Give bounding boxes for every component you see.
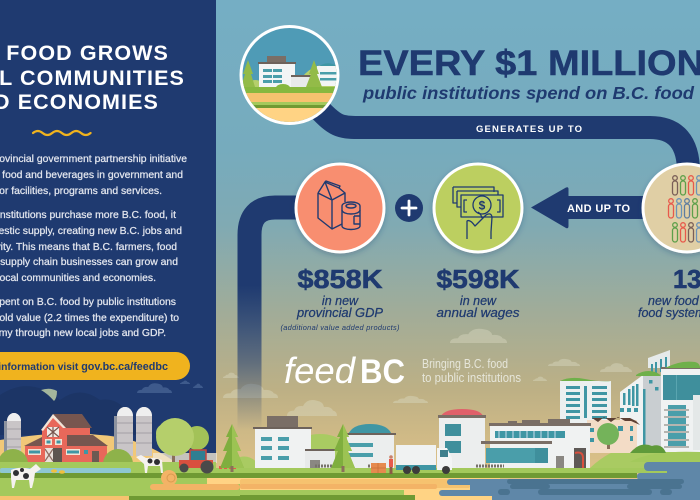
truck	[396, 445, 452, 474]
road: from GDP circle down, fading	[250, 208, 300, 430]
hay hills	[0, 433, 175, 462]
stat: GDP: (additional value added products)	[280, 323, 400, 332]
silos	[4, 407, 152, 456]
plus sign	[395, 194, 423, 222]
angled building	[620, 371, 661, 452]
hay bale	[161, 470, 177, 486]
tower block	[560, 378, 611, 425]
dome building	[344, 424, 396, 468]
stat: jobs	[638, 266, 700, 320]
pond	[0, 468, 131, 473]
apartment block	[586, 417, 640, 453]
ducks	[51, 469, 65, 474]
panel heading	[0, 41, 185, 114]
cow right	[136, 455, 163, 473]
factory building	[481, 419, 591, 468]
road: generates up to	[318, 108, 688, 172]
ground bands	[0, 462, 668, 500]
green shrubs	[630, 445, 666, 453]
water	[439, 462, 700, 500]
road label: GENERATES UP TO	[476, 124, 582, 135]
round tree	[597, 423, 619, 449]
bushes	[0, 449, 133, 479]
stat: GDP: provincial GDP	[296, 306, 384, 320]
circle: institution scene	[240, 25, 340, 128]
illustration: town hills	[225, 434, 700, 470]
fence	[153, 453, 217, 463]
tree	[156, 418, 209, 468]
circle: GDP icon	[296, 164, 384, 252]
logo tagline	[422, 357, 521, 385]
website pill	[0, 352, 190, 380]
big building	[661, 362, 700, 452]
wavy divider	[33, 131, 91, 135]
logo tagline: Bringing B.C. food	[422, 357, 508, 371]
worker	[389, 455, 393, 474]
illustration: town	[220, 350, 700, 474]
title: EVERY $1 MILLION	[358, 43, 700, 83]
cow left	[11, 464, 41, 488]
stat: GDP: in new	[322, 294, 359, 308]
clouds and moon	[41, 380, 203, 401]
logo: feed BC	[284, 350, 405, 391]
body text	[0, 154, 187, 339]
people rows	[668, 176, 700, 242]
stat: GDP	[280, 266, 400, 332]
tractor	[179, 450, 214, 474]
hospital building	[438, 409, 486, 468]
arrow label: AND UP TO	[567, 203, 630, 215]
illustration: farm scene	[0, 380, 217, 479]
circle: jobs icon	[643, 164, 700, 252]
stat: wages	[436, 266, 520, 320]
panel: left description	[0, 0, 216, 500]
stat: wages: annual wages	[436, 306, 520, 320]
subtitle: public institutions spend on B.C. food	[362, 83, 694, 103]
trees	[220, 424, 244, 472]
circle: wages icon: $	[479, 198, 486, 212]
arrow: and up to	[531, 187, 650, 228]
back building	[648, 350, 670, 373]
stat: wages: $598K	[436, 266, 520, 294]
fences	[315, 464, 504, 468]
night hills	[0, 386, 140, 435]
stat: wages: in new	[460, 294, 497, 308]
logo tagline: to public institutions	[422, 371, 521, 385]
stat: GDP: $858K	[298, 266, 383, 294]
foreground slope	[630, 452, 700, 462]
crates	[371, 463, 386, 473]
barn	[24, 414, 108, 463]
logo: feed BC: feed	[284, 350, 356, 391]
clouds	[223, 329, 632, 416]
circle: wages icon	[434, 164, 522, 252]
tulips	[219, 466, 236, 469]
main building left	[253, 416, 336, 468]
logo: feed BC: BC	[360, 353, 405, 391]
